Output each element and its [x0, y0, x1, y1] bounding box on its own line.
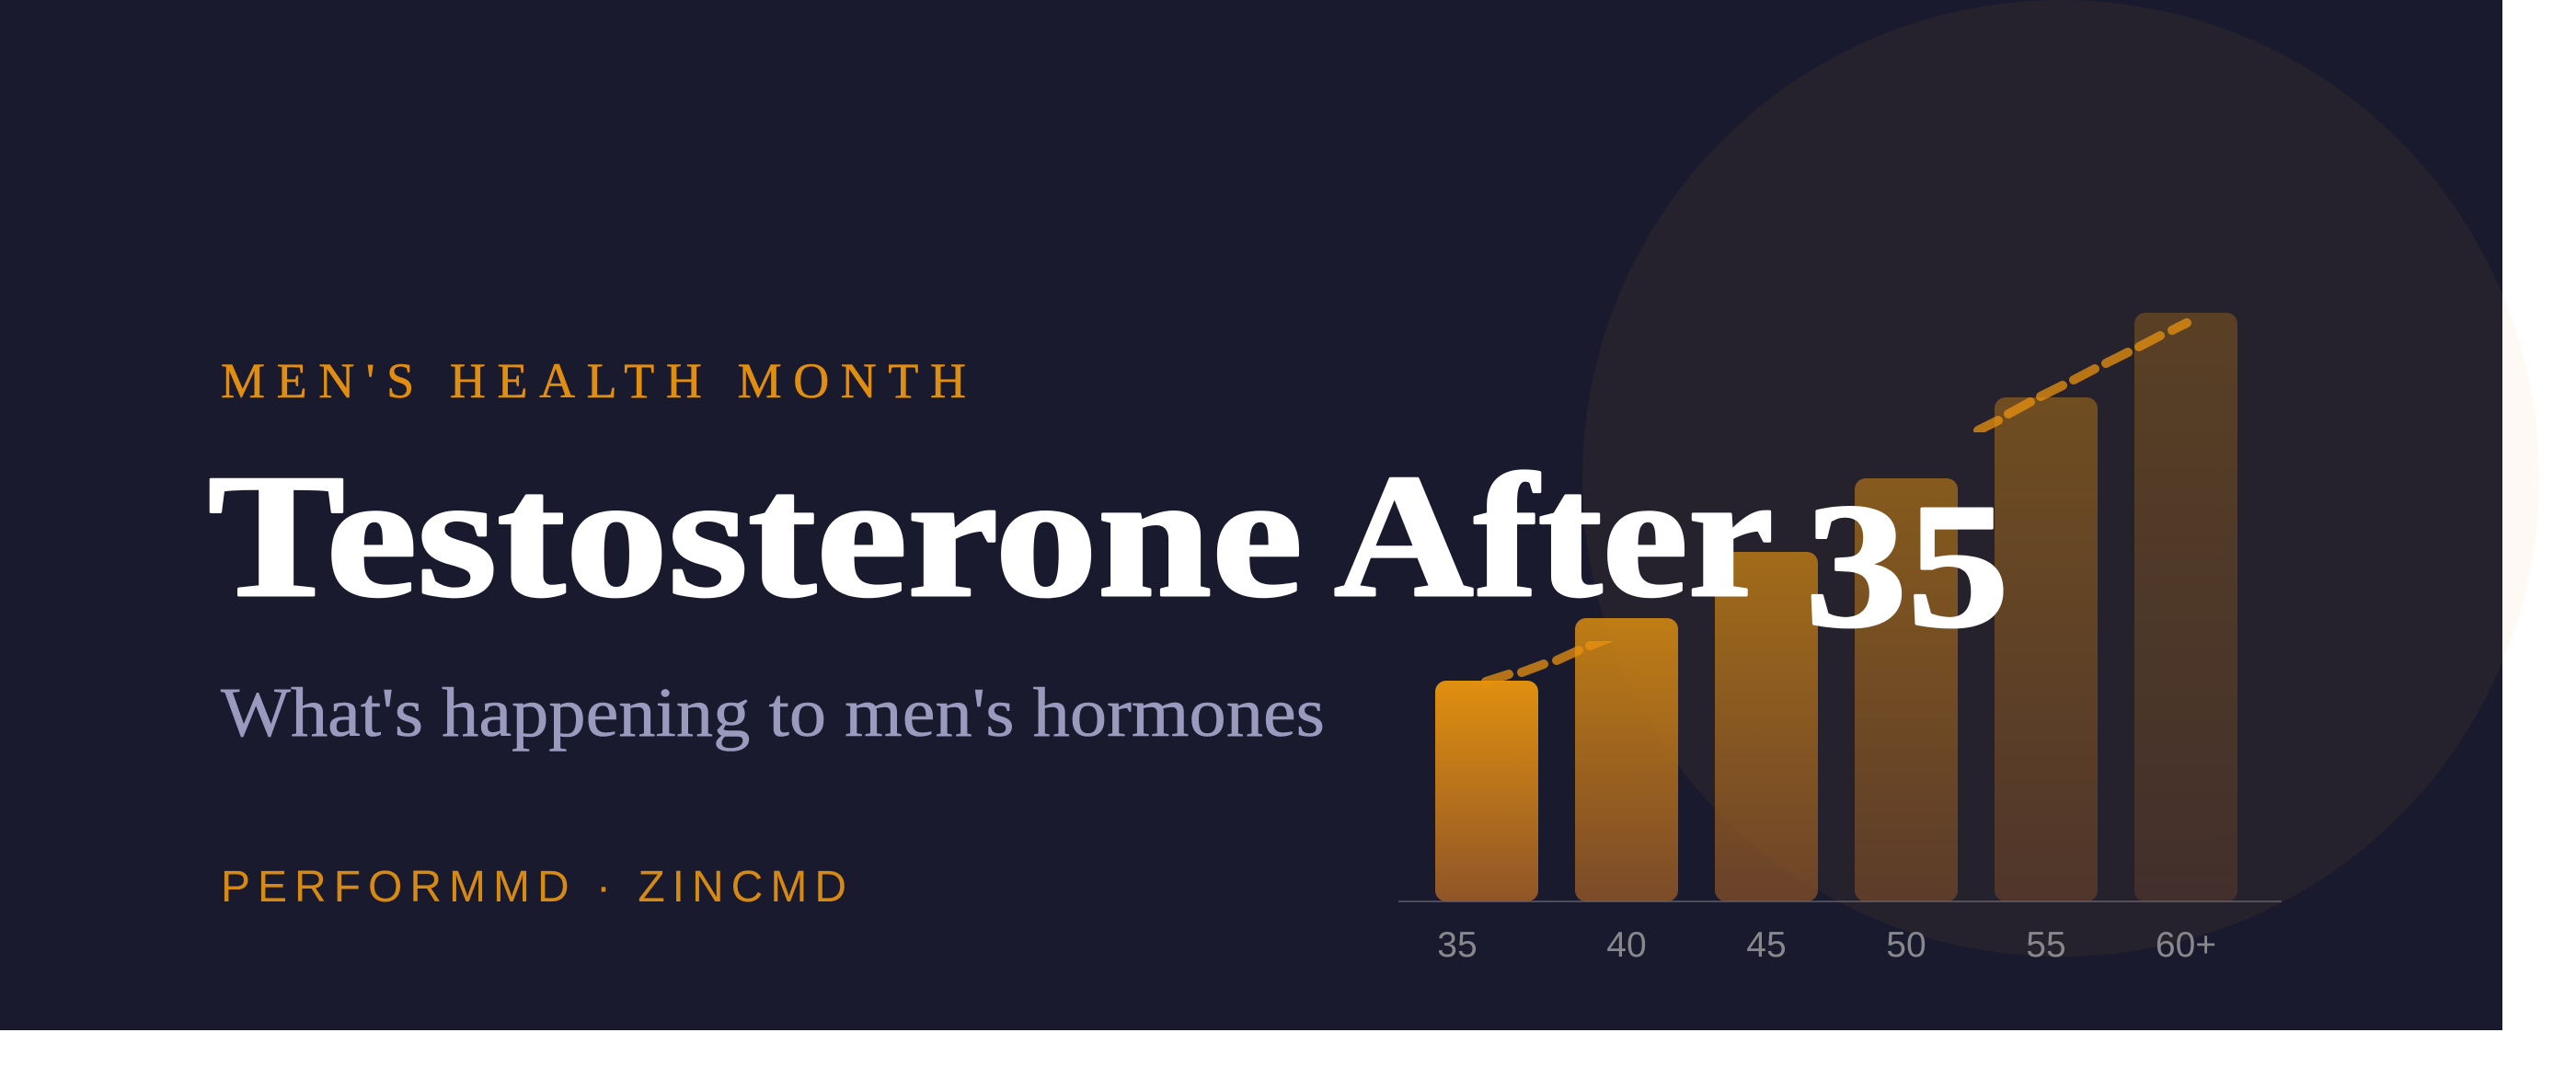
- subtitle: What's happening to men's hormones: [221, 674, 1325, 751]
- footer brands: PERFORMMD · ZINCMD: [221, 863, 846, 912]
- bar: age 35: [1435, 681, 1538, 901]
- title: [208, 438, 2009, 664]
- dashed trend line: upper segment: [1978, 323, 2187, 430]
- age label: 40: 40: [1606, 925, 1647, 965]
- bar: age 55: [1995, 397, 2098, 901]
- age label: 35: 35: [1437, 925, 1478, 965]
- bar: age 60+: [2134, 313, 2237, 901]
- age label: 55: 55: [2026, 925, 2066, 965]
- dashed trend line: lower segment: [1481, 641, 1614, 681]
- bar chart: rising levels by age: [1398, 313, 2282, 965]
- title number: 35: 35: [1805, 466, 2009, 664]
- age label: 50: 50: [1886, 925, 1926, 965]
- kicker: Men's Health Month: MEN'S HEALTH MONTH: [221, 353, 966, 408]
- age label: 45: 45: [1746, 925, 1787, 965]
- bar: age 50: [1855, 478, 1958, 901]
- age label: 60+: 60+: [2156, 925, 2216, 965]
- bar: age 40: [1575, 618, 1678, 901]
- title word: Testosterone: Testosterone: [208, 438, 1303, 634]
- decorative circle: [1582, 0, 2539, 957]
- chart baseline: [1398, 901, 2282, 902]
- bar: age 45: [1715, 552, 1818, 901]
- title word: After: After: [1334, 438, 1774, 634]
